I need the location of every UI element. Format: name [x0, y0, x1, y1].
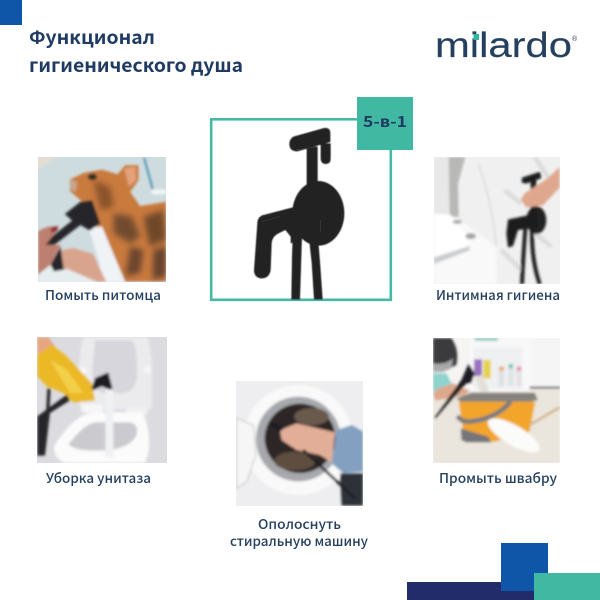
label: Ополоснуть [258, 513, 341, 533]
photo: mop and orange bucket [433, 338, 560, 463]
decorative corner square [0, 0, 22, 25]
badge: 5-в-1 [357, 97, 413, 150]
logo: milardo: milardo [435, 26, 572, 65]
label: Интимная гигиена [436, 284, 560, 304]
label: Помыть питомца [45, 284, 161, 304]
panel: intimate hygiene [428, 150, 568, 304]
badge: 5-в-1: 5-в-1 [363, 111, 407, 132]
icon: black hygienic shower mixer [253, 127, 346, 300]
logo: milardo: ® [572, 35, 578, 43]
label: стиральную машину [230, 530, 369, 550]
panel: rinse mop [428, 330, 568, 487]
title: Функционал [29, 24, 155, 50]
label [230, 513, 369, 550]
photo: shower on marble wall [434, 157, 560, 284]
panel: clean toilet [30, 330, 170, 487]
photo: cat being showered [38, 157, 166, 282]
photo: hands in washing machine drum [236, 381, 363, 506]
panel: product frame [211, 119, 391, 300]
panel: rinse washing machine [230, 375, 370, 550]
label: Промыть швабру [439, 467, 558, 487]
photo: gloved hand cleaning toilet [37, 337, 167, 463]
decorative corner blocks [407, 543, 600, 600]
label: Уборка унитаза [46, 467, 151, 487]
title: гигиенического душа [29, 52, 243, 78]
title [29, 24, 243, 78]
panel: wash pet [31, 150, 170, 304]
